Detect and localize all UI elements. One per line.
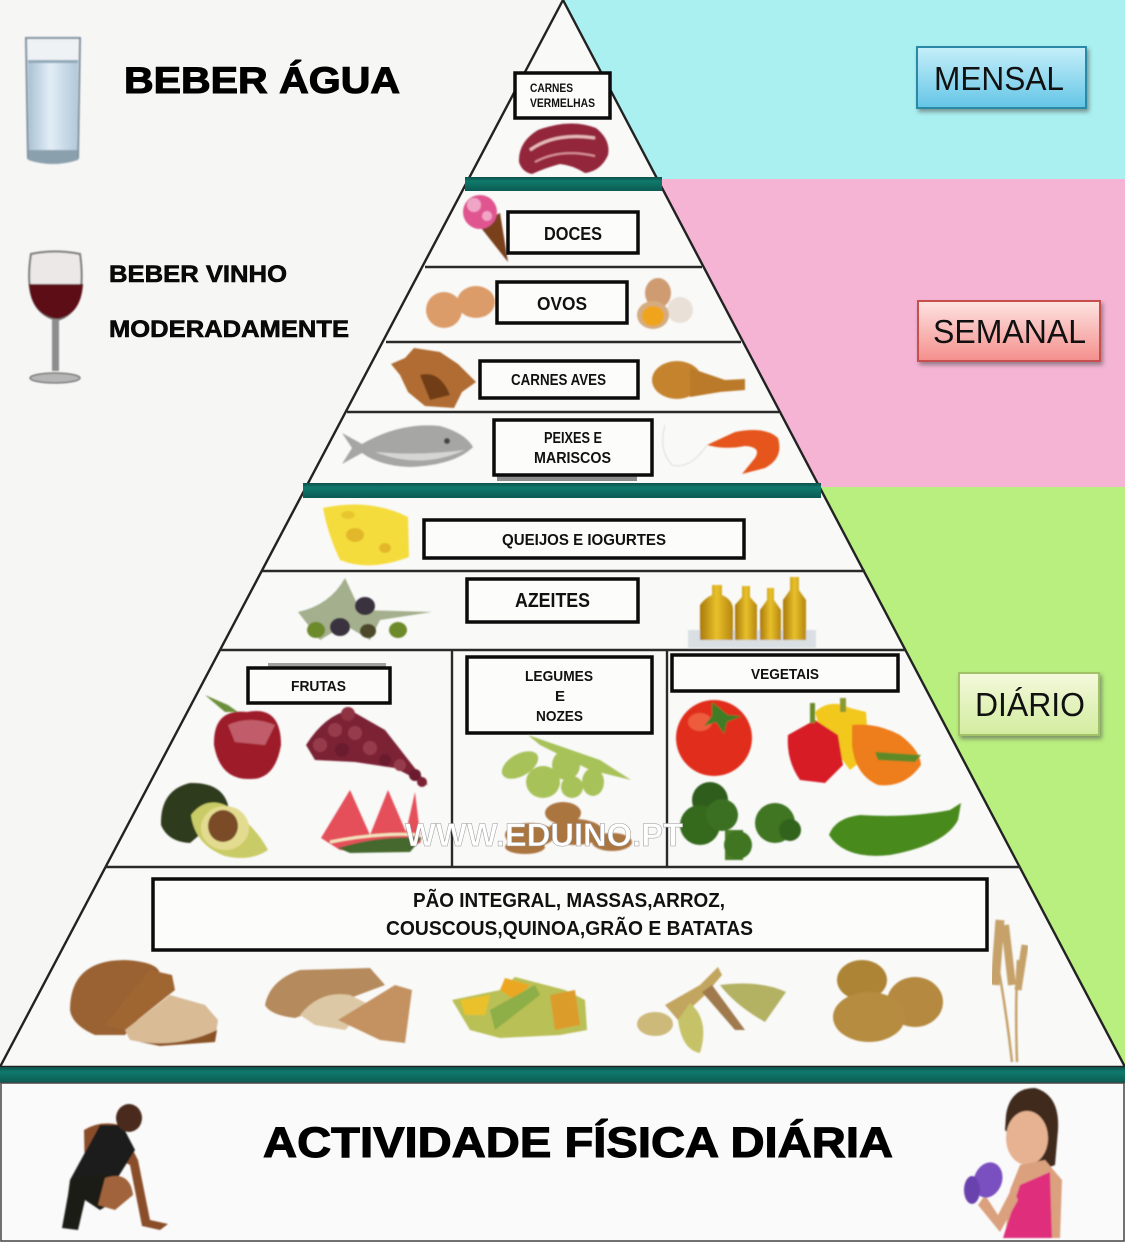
label: fruits	[248, 663, 390, 703]
icon: red meat	[519, 123, 608, 174]
panel: physical activity base	[1, 1083, 1124, 1241]
label: red meats: CARNES	[530, 81, 573, 95]
icon: almonds	[505, 802, 632, 854]
icon: bread	[70, 960, 218, 1046]
icon: pasta	[452, 977, 587, 1038]
label: sweets: DOCES	[544, 224, 602, 244]
icon: glass of water	[26, 38, 80, 164]
icon: wine glass	[29, 252, 83, 383]
label: weekly: SEMANAL	[933, 313, 1086, 350]
icon: cucumber	[829, 803, 961, 856]
icon: broccoli	[680, 782, 801, 860]
watermark: WWW.EDUINO.PT	[405, 817, 683, 853]
label: sweets	[508, 212, 638, 253]
icon: beans	[497, 735, 631, 798]
panel: daily background	[563, 487, 1125, 1067]
icon: ice cream	[463, 195, 508, 262]
label: legumes and nuts: E	[555, 688, 565, 705]
label: red meats	[515, 73, 610, 118]
label: cheeses and yogurts	[424, 520, 744, 558]
icon: eggs	[426, 278, 693, 329]
icon: tomato	[676, 700, 752, 776]
label: olive oils: AZEITES	[515, 590, 590, 612]
label: legumes and nuts: NOZES	[536, 708, 583, 725]
icon: potatoes	[833, 960, 943, 1042]
label: fruits: FRUTAS	[291, 678, 346, 695]
panel: monthly background	[563, 0, 1125, 179]
icon: fish	[342, 425, 473, 467]
icon: oil bottles	[688, 577, 816, 648]
icon: avocado	[161, 783, 268, 858]
label: fish and seafood: PEIXES E	[544, 430, 602, 447]
icon: runner	[62, 1104, 168, 1230]
label: red meats: VERMELHAS	[530, 96, 595, 110]
label: olive oils	[467, 579, 638, 622]
label: poultry	[480, 361, 638, 398]
text: drink wine moderately: MODERADAMENTE	[109, 316, 349, 343]
icon: grapes	[306, 707, 428, 787]
icon: woman with dumbbell	[964, 1088, 1062, 1238]
label: eggs	[497, 282, 627, 323]
icon: olives	[298, 578, 432, 640]
label: vegetables	[672, 655, 898, 691]
icon: peppers	[788, 698, 921, 785]
text: drink wine moderately: BEBER VINHO	[109, 261, 287, 288]
label: vegetables: VEGETAIS	[751, 666, 819, 683]
icon: cheese	[323, 505, 409, 565]
label: weekly	[918, 301, 1100, 361]
heading: drink water: BEBER ÁGUA	[124, 60, 400, 101]
label: monthly	[917, 47, 1086, 108]
icon: watermelon	[321, 790, 422, 853]
label: grains	[153, 879, 987, 950]
label: legumes and nuts: LEGUMES	[525, 668, 593, 685]
icon: wheat	[995, 920, 1025, 1062]
label: poultry: CARNES AVES	[511, 372, 606, 389]
label: daily	[959, 673, 1099, 735]
label: cheeses and yogurts: QUEIJOS E IOGURTES	[502, 532, 666, 549]
label: monthly: MENSAL	[934, 60, 1064, 97]
panel: weekly background	[563, 179, 1125, 487]
label: fish and seafood	[494, 420, 652, 481]
icon: sliced wholemeal bread	[265, 968, 412, 1043]
label: grains: PÃO INTEGRAL, MASSAS,ARROZ,	[413, 889, 725, 912]
icon: shrimp	[663, 425, 779, 474]
icon: apple	[205, 695, 281, 779]
label: fish and seafood: MARISCOS	[534, 450, 611, 467]
label: daily: DIÁRIO	[975, 686, 1085, 723]
icon: roast chicken and leg	[391, 348, 745, 408]
text: drink wine moderately	[109, 261, 349, 343]
icon: corn and grains	[637, 967, 786, 1053]
label: legumes and nuts	[467, 657, 652, 733]
label: grains: COUSCOUS,QUINOA,GRÃO E BATATAS	[386, 917, 753, 940]
heading: daily physical activity: ACTIVIDADE FÍSICA DIÁRIA	[263, 1119, 893, 1167]
label: eggs: OVOS	[537, 294, 587, 314]
